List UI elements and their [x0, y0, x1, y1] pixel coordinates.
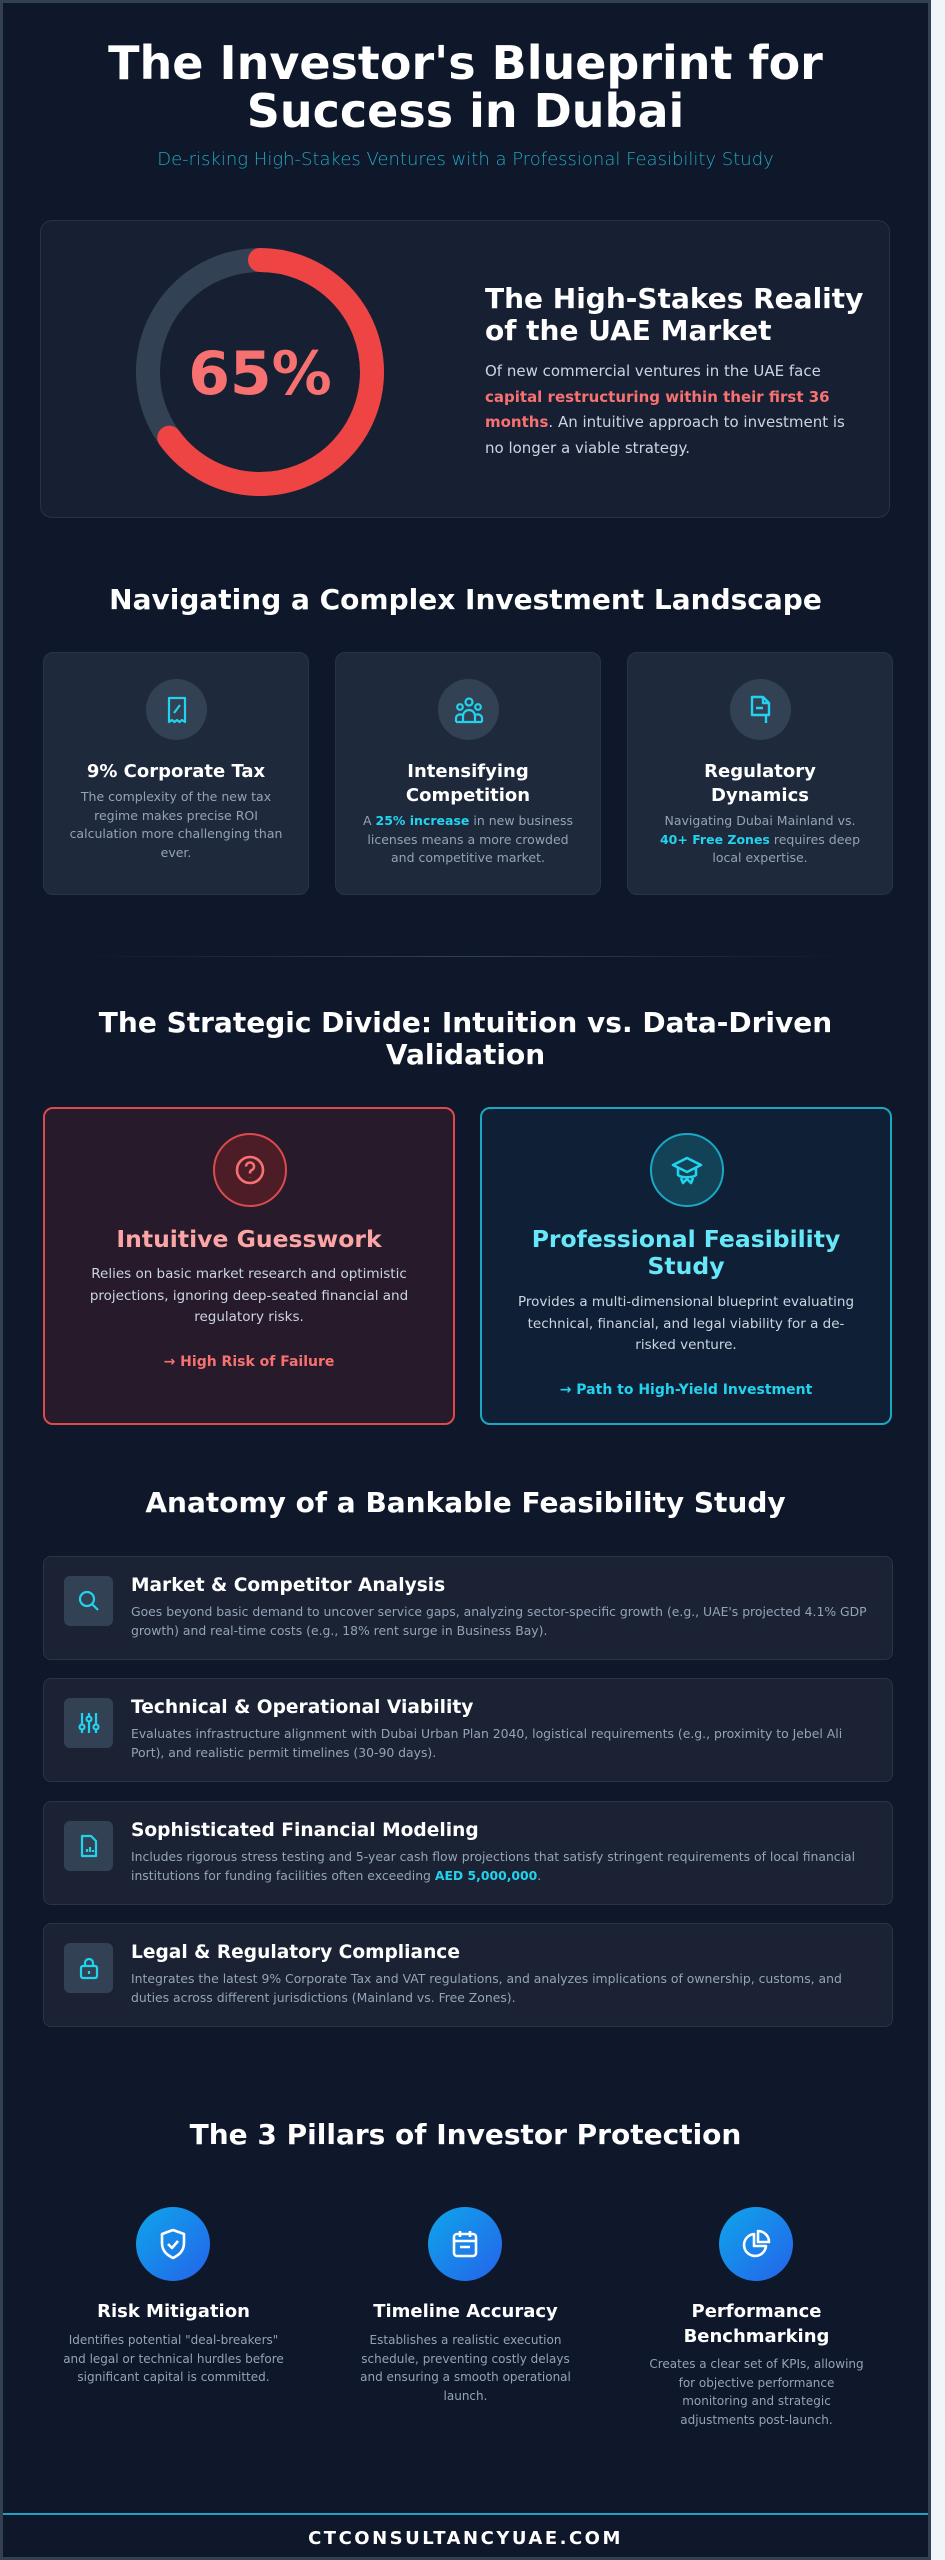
- heading: navigating: Navigating a Complex Investment Landscape: [109, 583, 822, 616]
- pillar: risk mitigation: [63, 2207, 284, 2384]
- heading: strategic divide: Validation: [386, 1038, 545, 1071]
- panel: professional feasibility study: [480, 1107, 892, 1425]
- pillar: performance benchmarking: Performance: [692, 2301, 821, 2322]
- card: competition: [335, 652, 601, 895]
- pillar: performance benchmarking: Creates a clear set of KPIs, allowing: [649, 2357, 864, 2371]
- icon: blueprint: [650, 1133, 724, 1207]
- panel: intuitive guesswork: [43, 1107, 455, 1425]
- donut chart 65%: 65%: [188, 339, 332, 409]
- row: legal compliance: Integrates the latest 9% Corporate Tax and VAT regulations, and analyzes implications of ownership, customs, and duties across different jurisdictions (Mainland vs. Free Zones).: [131, 1971, 842, 2005]
- panel heading: The High-Stakes Reality: [485, 282, 863, 315]
- outcome: → High Risk of Failure: [164, 1354, 334, 1370]
- title: Success in Dubai: [247, 84, 684, 138]
- title: Study: [647, 1252, 725, 1280]
- row: market analysis: Market & Competitor Analysis: [131, 1575, 445, 1596]
- panel: high-stakes reality: [40, 220, 890, 518]
- title: [108, 36, 823, 138]
- title: Intuitive Guesswork: [116, 1225, 382, 1253]
- icon: sliders: [64, 1698, 113, 1748]
- outcome: → Path to High-Yield Investment: [560, 1382, 812, 1398]
- pillar: performance benchmarking: [649, 2207, 864, 2427]
- pillar: timeline accuracy: Establishes a realistic execution schedule, preventing costly delays and ensuring a smooth operational launch.: [360, 2333, 571, 2403]
- panel text: no longer a viable strategy.: [485, 438, 690, 456]
- pillar: performance benchmarking: adjustments post-launch.: [680, 2413, 833, 2427]
- panel text: [485, 362, 845, 456]
- icon: calendar: [428, 2207, 502, 2281]
- pillar: risk mitigation: Risk Mitigation: [97, 2301, 250, 2322]
- panel text: Of new commercial ventures in the UAE face: [485, 362, 821, 380]
- row: market analysis: [43, 1556, 893, 1660]
- card: competition: A 25% increase in new business licenses means a more crowded and competitive market.: [363, 813, 573, 865]
- row: legal compliance: Legal & Regulatory Compliance: [131, 1942, 460, 1963]
- icon: pie chart: [719, 2207, 793, 2281]
- row: financial modeling: Sophisticated Financial Modeling: [131, 1820, 479, 1841]
- card: regulatory: Navigating Dubai Mainland vs. 40+ Free Zones requires deep local expertise.: [660, 813, 860, 865]
- pillar: performance benchmarking: Benchmarking: [684, 2326, 829, 2347]
- icon: question: [213, 1133, 287, 1207]
- heading: anatomy: Anatomy of a Bankable Feasibility Study: [145, 1486, 786, 1519]
- pillar: performance benchmarking: for objective performance: [679, 2376, 834, 2390]
- icon: file chart: [64, 1821, 113, 1871]
- footer: CTCONSULTANCYUAE.COM: [308, 2528, 623, 2549]
- icon: search: [64, 1576, 113, 1626]
- row: market analysis: Goes beyond basic demand to uncover service gaps, analyzing sector-specific growth (e.g., UAE's projected 4.1% GDP growth) and real-time costs (e.g., 18% rent surge in Business Bay).: [131, 1604, 867, 1638]
- donut chart 65%: [136, 248, 384, 496]
- card: regulatory: [627, 652, 893, 895]
- title: [532, 1225, 840, 1280]
- card: regulatory: Dynamics: [711, 785, 809, 806]
- footer: [3, 2513, 928, 2557]
- pillar: performance benchmarking: monitoring and strategic: [682, 2394, 831, 2408]
- panel heading: [485, 282, 863, 347]
- row: technical viability: [43, 1678, 893, 1782]
- card: regulatory: Regulatory: [704, 761, 816, 782]
- card: competition: Competition: [406, 785, 530, 806]
- pillar: timeline accuracy: [360, 2207, 571, 2403]
- subtitle: De-risking High-Stakes Ventures with a Professional Feasibility Study: [157, 149, 774, 170]
- row: financial modeling: [43, 1801, 893, 1905]
- heading: strategic divide: [98, 1006, 832, 1071]
- title: The Investor's Blueprint for: [108, 36, 823, 90]
- card: corporate tax: The complexity of the new tax regime makes precise ROI calculation more challenging than ever.: [70, 789, 282, 860]
- icon: receipt percent: [146, 679, 207, 740]
- panel text: capital restructuring within their first 36: [485, 388, 830, 406]
- row: technical viability: Evaluates infrastructure alignment with Dubai Urban Plan 2040, logistical requirements (e.g., proximity to Jebel Ali Port), and realistic permit timelines (30-90 days).: [131, 1726, 842, 1760]
- pillar: risk mitigation: Identifies potential "deal-breakers" and legal or technical hurdles before significant capital is committed.: [63, 2333, 284, 2384]
- card: competition: Intensifying: [407, 761, 529, 782]
- row: technical viability: Technical & Operational Viability: [131, 1697, 473, 1718]
- description: Relies on basic market research and optimistic projections, ignoring deep-seated financial and regulatory risks.: [90, 1266, 408, 1325]
- title: Professional Feasibility: [532, 1225, 840, 1253]
- row: legal compliance: [43, 1923, 893, 2027]
- row: financial modeling: Includes rigorous stress testing and 5-year cash flow projections that satisfy stringent requirements of local financial institutions for funding facilities often exceeding AED 5,000,000.: [131, 1849, 855, 1883]
- heading: pillars: The 3 Pillars of Investor Protection: [190, 2118, 741, 2151]
- heading: strategic divide: The Strategic Divide: Intuition vs. Data-Driven: [99, 1006, 832, 1039]
- icon: document: [730, 679, 791, 740]
- description: Provides a multi-dimensional blueprint evaluating technical, financial, and legal viability for a de-risked venture.: [518, 1294, 854, 1353]
- icon: lock: [64, 1943, 113, 1993]
- icon: shield: [136, 2207, 210, 2281]
- icon: people: [438, 679, 499, 740]
- panel text: months. An intuitive approach to investment is: [485, 413, 845, 431]
- card: corporate tax: [43, 652, 309, 895]
- panel heading: of the UAE Market: [485, 314, 771, 347]
- card: corporate tax: 9% Corporate Tax: [87, 761, 265, 782]
- pillar: timeline accuracy: Timeline Accuracy: [373, 2301, 558, 2322]
